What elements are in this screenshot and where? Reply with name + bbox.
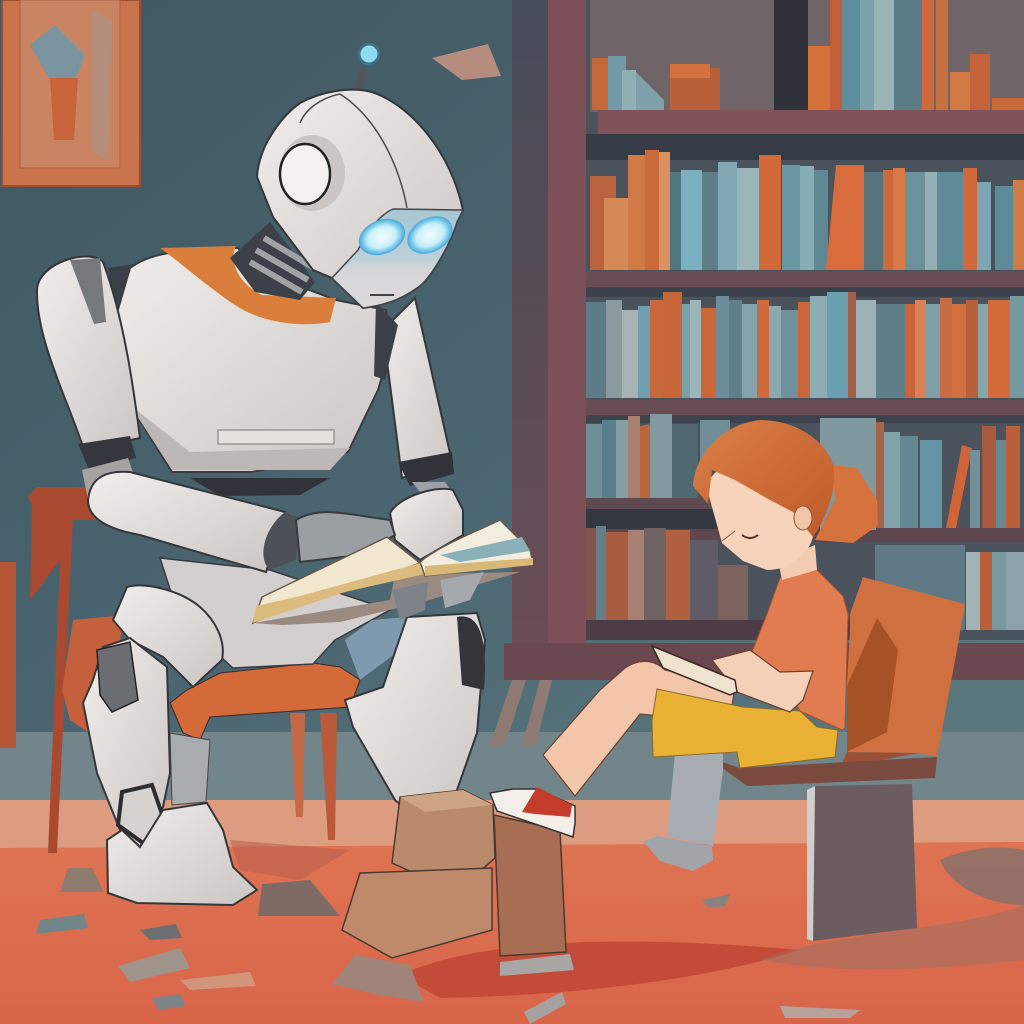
robot head	[257, 90, 463, 308]
child	[490, 420, 878, 837]
robot hand	[296, 512, 395, 562]
cardboard boxes	[342, 790, 566, 958]
leaning books under bookcase	[490, 680, 552, 745]
robot back shoulder	[108, 262, 164, 374]
robot right arm	[374, 298, 463, 560]
wall	[0, 0, 1024, 780]
robot right knee and shin	[345, 613, 485, 830]
robot left upper arm	[37, 257, 140, 510]
books: bottom shelf	[586, 526, 1024, 640]
child shorts	[652, 689, 838, 768]
open book	[253, 520, 533, 625]
wall scrap	[432, 44, 501, 80]
robot ankle	[170, 733, 210, 805]
robot torso	[112, 246, 390, 496]
back chair	[0, 487, 360, 853]
robot pelvis	[160, 558, 390, 668]
child shirt	[750, 570, 848, 730]
robot	[37, 44, 485, 905]
child's chair	[643, 577, 965, 941]
robot left shin	[83, 638, 170, 848]
poster	[2, 0, 140, 186]
child neck and head	[693, 420, 878, 580]
robot forearm	[88, 472, 300, 572]
bookcase	[504, 0, 1024, 680]
books: fourth shelf	[586, 414, 1020, 530]
floor	[0, 800, 1024, 1024]
robot neck	[230, 222, 315, 300]
robot eyes	[353, 209, 459, 262]
child arm	[712, 650, 813, 712]
books: second shelf	[590, 150, 1024, 270]
child leg	[543, 661, 735, 796]
books: third shelf	[586, 292, 1024, 398]
child's book	[652, 646, 737, 695]
baseboard	[0, 732, 1024, 802]
robot thigh near	[113, 586, 223, 687]
books: top shelf	[592, 0, 1024, 110]
child shoe	[490, 787, 575, 837]
robot foot	[107, 803, 257, 905]
robot antenna	[358, 44, 379, 90]
floor debris	[36, 868, 860, 1024]
